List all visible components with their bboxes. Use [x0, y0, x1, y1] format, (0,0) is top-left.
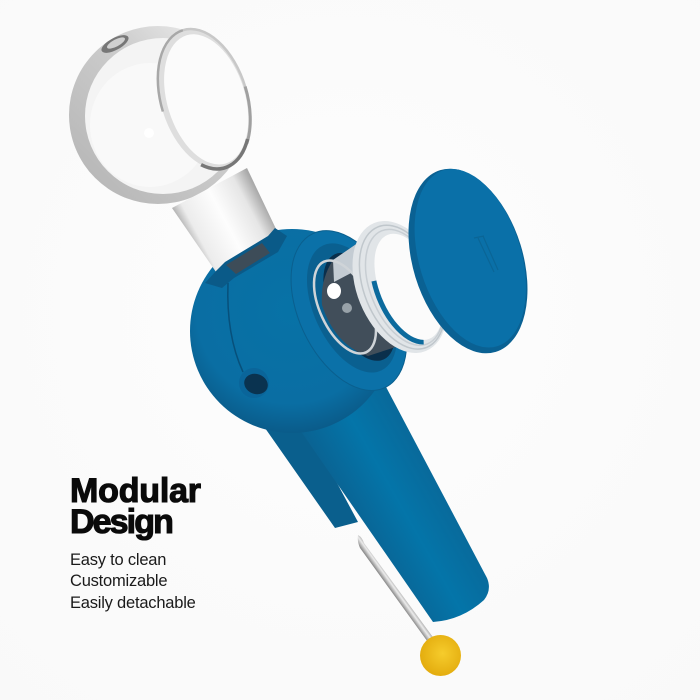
- feature list: Customizable: [70, 572, 167, 590]
- glass globe: [69, 18, 266, 204]
- lower stem piece: [265, 420, 358, 528]
- feature list: Easy to clean: [70, 551, 166, 569]
- feature list: Easily detachable: [70, 594, 196, 612]
- ball body: [190, 229, 394, 433]
- translucent upper wall: [333, 238, 372, 282]
- heading: Modular: [70, 472, 201, 510]
- heading and feature text: [70, 472, 201, 612]
- feature list: [70, 551, 196, 612]
- lens: [327, 283, 341, 299]
- heading and feature text: Design: [70, 503, 172, 541]
- body seam and slot: [228, 283, 271, 398]
- logo mark on cap: [474, 236, 498, 272]
- cleaning needle: [358, 535, 461, 676]
- globe opening: [142, 18, 266, 180]
- pin hole: [342, 303, 352, 313]
- clear interior: [361, 224, 456, 350]
- large front ring: [334, 207, 466, 367]
- cylinder hull: [322, 238, 402, 356]
- glass ring insert: [301, 207, 466, 367]
- blue reflected wall: [374, 272, 424, 349]
- yellow ball handle: [420, 635, 461, 676]
- illustration: modular pipe: [69, 18, 548, 676]
- neck socket: [205, 228, 287, 288]
- collar ring: [268, 212, 430, 409]
- handle: [300, 385, 489, 622]
- glass neck: [172, 168, 277, 272]
- small rear ring: [301, 251, 389, 363]
- silicone cap: [388, 154, 548, 368]
